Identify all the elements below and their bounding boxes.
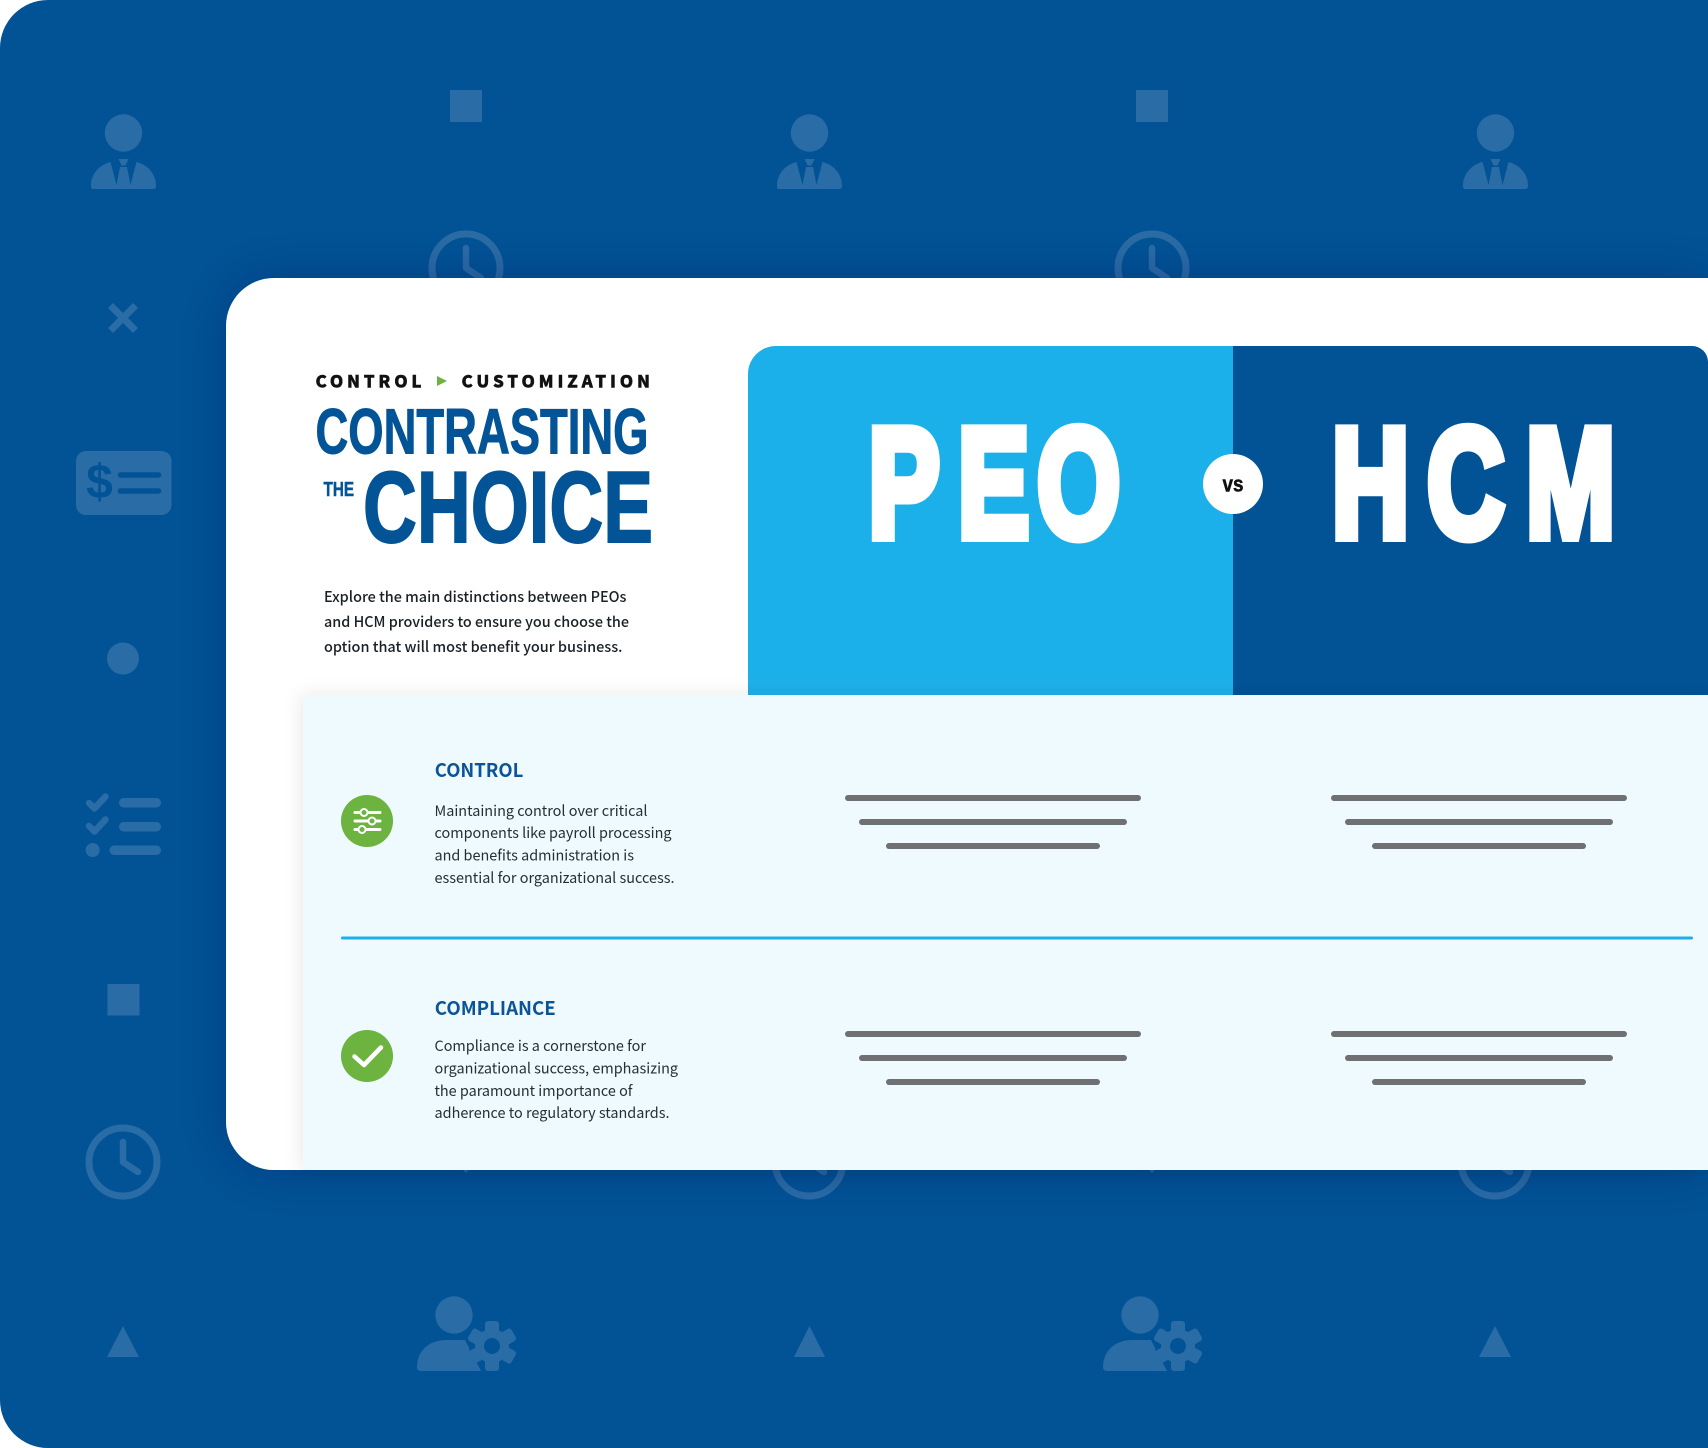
placeholder lines: control HCM (1331, 795, 1627, 849)
icon: person top right (1463, 114, 1528, 189)
description: compliance (434, 1035, 678, 1123)
description: control: components like payroll processing (434, 822, 672, 843)
icon: partly hidden shape 2 (1147, 1168, 1157, 1173)
comparison panel (303, 695, 1708, 1170)
icon: circle (107, 642, 139, 674)
title: CONTRASTING (316, 396, 648, 468)
icon: clock left (89, 1128, 157, 1196)
eyebrow: control customization: CUSTOMIZATION (462, 368, 650, 392)
intro text: option that will most benefit your business. (324, 636, 622, 657)
icon: triangle 3 (1479, 1326, 1511, 1357)
icon: person with gear 1 (417, 1296, 517, 1371)
description: control: Maintaining control over critical (434, 800, 648, 821)
icon: green arrow (437, 376, 447, 386)
eyebrow: control customization (316, 368, 650, 392)
title: CHOICE (363, 452, 653, 564)
row: control (341, 756, 1627, 888)
intro text: and HCM providers to ensure you choose the (324, 611, 629, 632)
description: compliance: adherence to regulatory standards. (434, 1102, 670, 1123)
description: control: and benefits administration is (434, 844, 634, 866)
placeholder lines: compliance PEO (845, 1031, 1141, 1085)
icon: dollar card (76, 451, 172, 515)
description: control: essential for organizational success. (434, 867, 674, 888)
intro text (324, 586, 629, 657)
icon: person with gear 2 (1103, 1296, 1203, 1371)
heading: compliance: COMPLIANCE (435, 994, 556, 1021)
intro text: Explore the main distinctions between PEOs (324, 586, 626, 607)
icon: cross (110, 306, 136, 330)
icon: partly hidden shape 1 (461, 1168, 471, 1173)
icon: sliders (341, 795, 393, 847)
icon: checklist (86, 796, 161, 857)
eyebrow: control customization: CONTROL (316, 368, 422, 392)
icon: person top left (91, 114, 156, 189)
icon: check mark (341, 1030, 393, 1082)
icon: square 2 (1136, 90, 1168, 122)
icon: clock lower 1 (775, 1128, 843, 1196)
header: HCM column (1233, 346, 1708, 695)
header: HCM column: HCM (1332, 397, 1615, 570)
white card (226, 278, 1708, 1170)
placeholder lines: compliance HCM (1331, 1031, 1627, 1085)
header: PEO column: PEO (868, 397, 1120, 570)
icon: clock lower 2 (1461, 1128, 1529, 1196)
icon: clock upper 2 (1118, 234, 1186, 302)
heading: control: CONTROL (435, 756, 523, 783)
header: PEO column (748, 346, 1233, 695)
placeholder lines: control PEO (845, 795, 1141, 849)
description: compliance: the paramount importance of (434, 1080, 634, 1101)
icon: square left (108, 984, 140, 1016)
icon: dollar card: $ (86, 456, 113, 509)
divider (341, 936, 1693, 940)
icon: triangle 2 (794, 1326, 825, 1357)
title: THE (324, 479, 354, 501)
row: compliance (341, 994, 1627, 1123)
title (316, 396, 653, 564)
icon: square 1 (450, 90, 482, 122)
background icon pattern (76, 90, 1529, 1371)
icon: clock upper 1 (432, 234, 500, 302)
description: control (434, 800, 674, 888)
description: compliance: Compliance is a cornerstone for (434, 1035, 646, 1056)
description: compliance: organizational success, emphasizing (434, 1058, 678, 1078)
vs badge (1203, 454, 1263, 514)
vs badge: vs (1222, 472, 1244, 496)
icon: person top centre (777, 114, 842, 189)
icon: triangle 1 (107, 1326, 139, 1357)
